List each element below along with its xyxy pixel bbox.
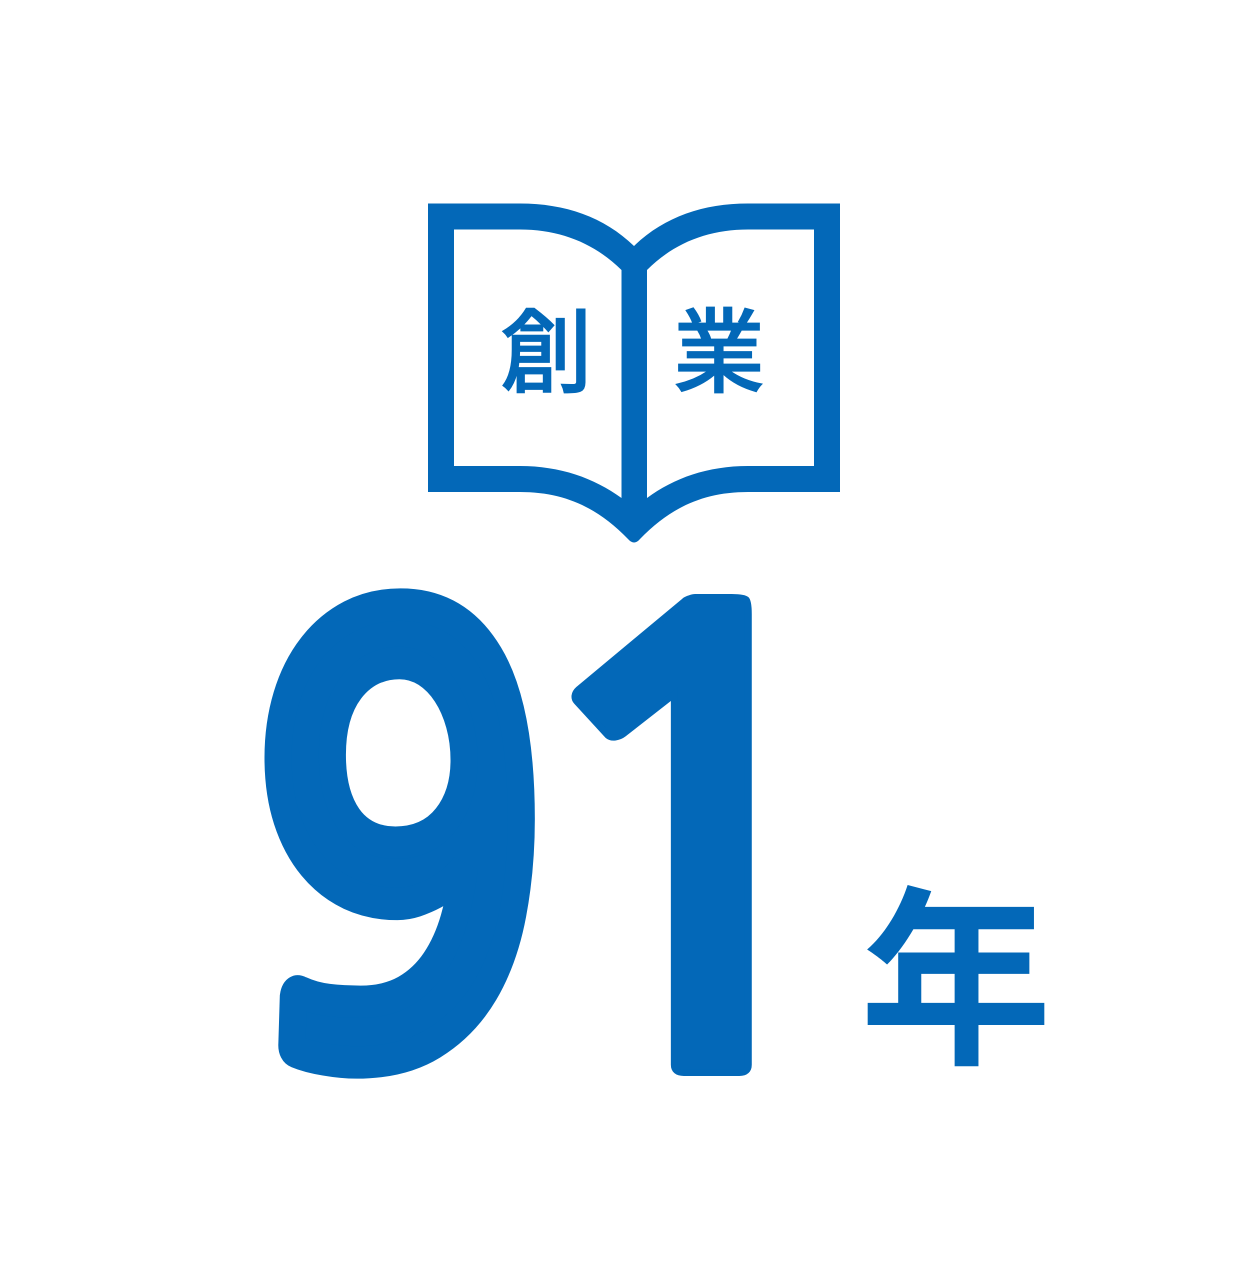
book label: left page character: 創 [500,279,592,412]
unit: year: 年 [860,827,1052,1105]
icon: open book [428,204,840,542]
digit 1: ​ [486,545,905,1165]
book label: right page character: 業 [673,279,765,412]
digit 1: 1 [486,545,905,1165]
big number: 91 [250,545,905,1165]
digit 9: 9 [250,560,549,1144]
